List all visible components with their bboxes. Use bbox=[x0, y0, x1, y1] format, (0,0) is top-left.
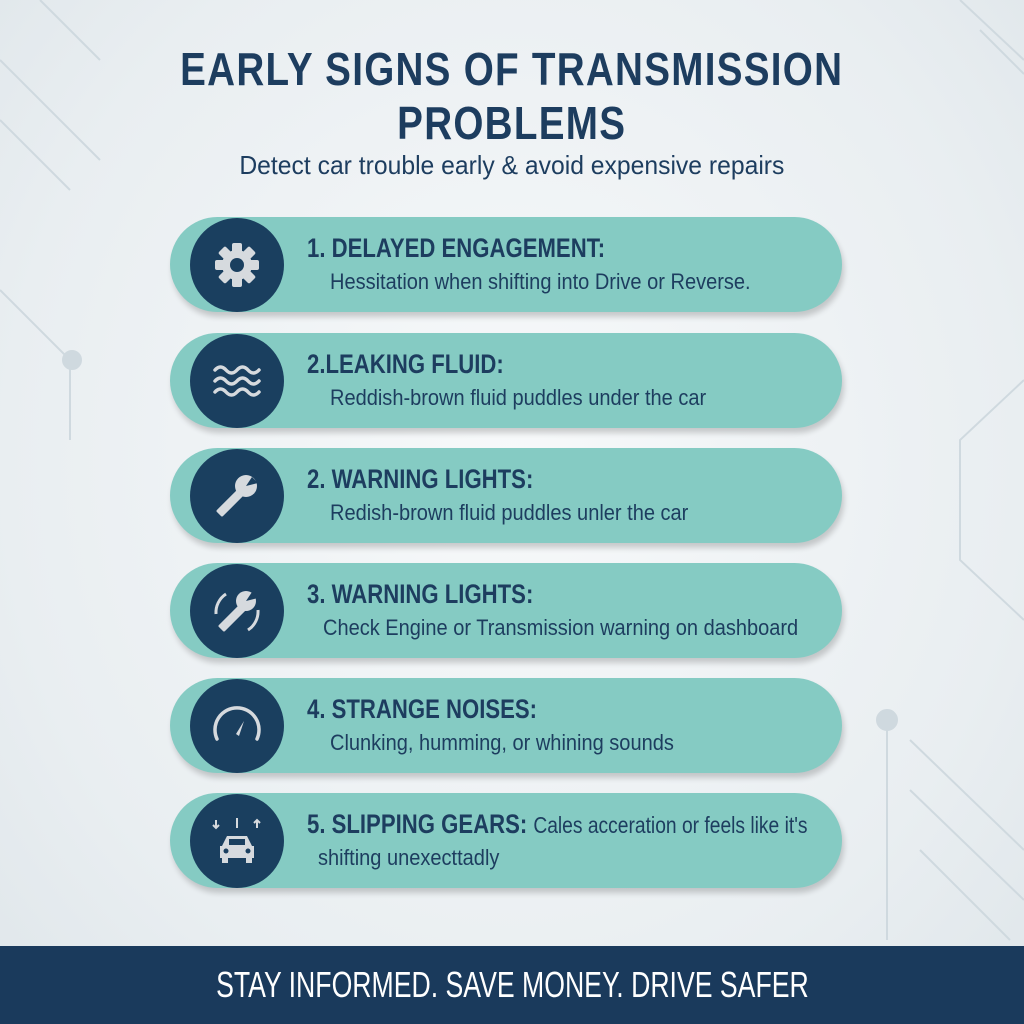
heading: 1. DELAYED ENGAGEMENT: bbox=[307, 233, 605, 263]
description: Clunking, humming, or whining sounds bbox=[330, 730, 674, 755]
heading: 3. WARNING LIGHTS: bbox=[307, 579, 533, 609]
icon: wrench bbox=[190, 449, 284, 543]
icon: gear bbox=[190, 218, 284, 312]
description: Hessitation when shifting into Drive or Reverse. bbox=[330, 269, 751, 294]
subtitle: Detect car trouble early & avoid expensive repairs bbox=[239, 150, 785, 180]
heading bbox=[307, 809, 808, 839]
description: Check Engine or Transmission warning on dashboard bbox=[323, 615, 798, 640]
icon: wrench circular bbox=[190, 564, 284, 658]
footer banner: STAY INFORMED. SAVE MONEY. DRIVE SAFER bbox=[216, 964, 808, 1005]
description: Reddish-brown fluid puddles under the car bbox=[330, 385, 706, 410]
icon: car bbox=[190, 794, 284, 888]
title: EARLY SIGNS OF TRANSMISSION bbox=[180, 43, 844, 95]
heading: 5. SLIPPING GEARS: bbox=[307, 809, 527, 839]
title: PROBLEMS bbox=[397, 97, 627, 149]
row 3 bbox=[170, 448, 842, 543]
row 4 bbox=[170, 563, 842, 658]
icon: gauge bbox=[190, 679, 284, 773]
row 1 bbox=[170, 217, 842, 312]
heading: 2.LEAKING FLUID: bbox=[307, 349, 504, 379]
row 5 bbox=[170, 678, 842, 773]
description: shifting unexecttadly bbox=[318, 845, 499, 870]
footer banner bbox=[0, 946, 1024, 1024]
title bbox=[180, 43, 844, 149]
row 6 bbox=[170, 793, 842, 888]
icon: waves bbox=[190, 334, 284, 428]
heading: Cales acceration or feels like it's bbox=[533, 812, 808, 838]
heading: 2. WARNING LIGHTS: bbox=[307, 464, 533, 494]
heading: 4. STRANGE NOISES: bbox=[307, 694, 537, 724]
row 2 bbox=[170, 333, 842, 428]
description: Redish-brown fluid puddles unler the car bbox=[330, 500, 688, 525]
